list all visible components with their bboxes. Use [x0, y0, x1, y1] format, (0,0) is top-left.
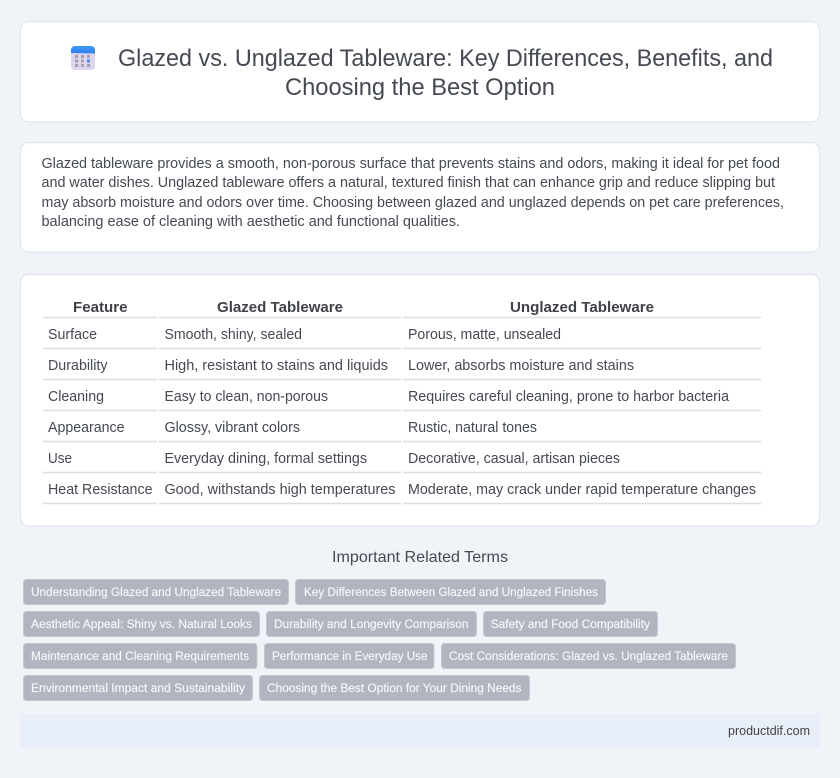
panel: comparison table	[20, 274, 820, 526]
table row: cleaning	[48, 389, 729, 405]
table row: surface: Surface	[48, 327, 97, 343]
title	[118, 45, 773, 101]
table row: appearance: Appearance	[48, 420, 124, 436]
table header: Feature	[73, 300, 128, 316]
text block: intro paragraph: Glazed tableware provides a smooth, non-porous surface that prevents stains and odors, making it ideal for pet food	[42, 156, 780, 172]
text block: intro paragraph: balancing ease of cleaning with aesthetic and functional qualities.	[42, 214, 460, 230]
tag: Aesthetic Appeal: Shiny vs. Natural Looks	[31, 617, 252, 631]
text block: intro paragraph: and water dishes. Unglazed tableware offers a natural, textured finish that can enhance grip and reduce slipping but	[42, 175, 775, 191]
tag	[484, 612, 658, 636]
tag: Choosing the Best Option for Your Dining Needs	[267, 681, 522, 695]
table row: use: Decorative, casual, artisan pieces	[408, 451, 620, 467]
table row: surface: Porous, matte, unsealed	[408, 327, 561, 343]
tag	[442, 644, 736, 668]
table row: heat resistance	[48, 482, 756, 498]
tag: Safety and Food Compatibility	[491, 617, 651, 631]
tag	[24, 580, 288, 604]
tag	[260, 676, 530, 700]
header panel	[20, 22, 820, 122]
footer bar	[20, 714, 820, 748]
tag	[264, 644, 434, 668]
table row: surface	[48, 327, 561, 343]
table row: durability: Lower, absorbs moisture and stains	[408, 358, 634, 374]
tag: Durability and Longevity Comparison	[274, 617, 468, 631]
tag	[24, 676, 252, 700]
tag: Cost Considerations: Glazed vs. Unglazed Tableware	[449, 649, 728, 663]
related terms tags	[24, 580, 736, 700]
table row: appearance: Rustic, natural tones	[408, 420, 537, 436]
tag: Maintenance and Cleaning Requirements	[31, 649, 249, 663]
table row: durability: Durability	[48, 358, 108, 374]
table row: heat resistance: Moderate, may crack under rapid temperature changes	[408, 482, 756, 498]
table row: use: Everyday dining, formal settings	[164, 451, 367, 467]
table row: cleaning: Requires careful cleaning, prone to harbor bacteria	[408, 389, 729, 405]
table row: heat resistance: Good, withstands high temperatures	[164, 482, 396, 498]
tag	[266, 612, 476, 636]
table row: use: Use	[48, 451, 72, 467]
tag: Environmental Impact and Sustainability	[31, 681, 246, 695]
tag	[296, 580, 606, 604]
tag	[24, 612, 260, 636]
table row: durability: High, resistant to stains and liquids	[164, 358, 388, 374]
table header	[73, 300, 654, 316]
table header: Unglazed Tableware	[510, 300, 654, 316]
footer source text: productdif.com	[728, 724, 810, 738]
heading: related terms: Important Related Terms	[332, 549, 508, 566]
table row: cleaning: Cleaning	[48, 389, 104, 405]
table row: durability	[48, 358, 634, 374]
text block: intro paragraph	[42, 156, 784, 230]
table header: Glazed Tableware	[217, 300, 343, 316]
tag: Performance in Everyday Use	[272, 649, 428, 663]
table row: appearance: Glossy, vibrant colors	[164, 420, 300, 436]
table row: appearance	[48, 420, 537, 436]
table row: surface: Smooth, shiny, sealed	[164, 327, 302, 343]
icon: calendar grid	[71, 46, 95, 70]
tag: Understanding Glazed and Unglazed Tableware	[31, 585, 281, 599]
tag: Key Differences Between Glazed and Unglazed Finishes	[304, 585, 598, 599]
title: Choosing the Best Option	[285, 74, 555, 101]
table row: use	[48, 451, 620, 467]
table row: heat resistance: Heat Resistance	[48, 482, 152, 498]
tag	[24, 644, 257, 668]
title: Glazed vs. Unglazed Tableware: Key Differences, Benefits, and	[118, 45, 773, 72]
panel: introduction	[20, 142, 820, 252]
table row: cleaning: Easy to clean, non-porous	[164, 389, 328, 405]
text block: intro paragraph: may absorb moisture and odors over time. Choosing between glazed and unglazed depends on pet care preferences,	[42, 195, 784, 211]
